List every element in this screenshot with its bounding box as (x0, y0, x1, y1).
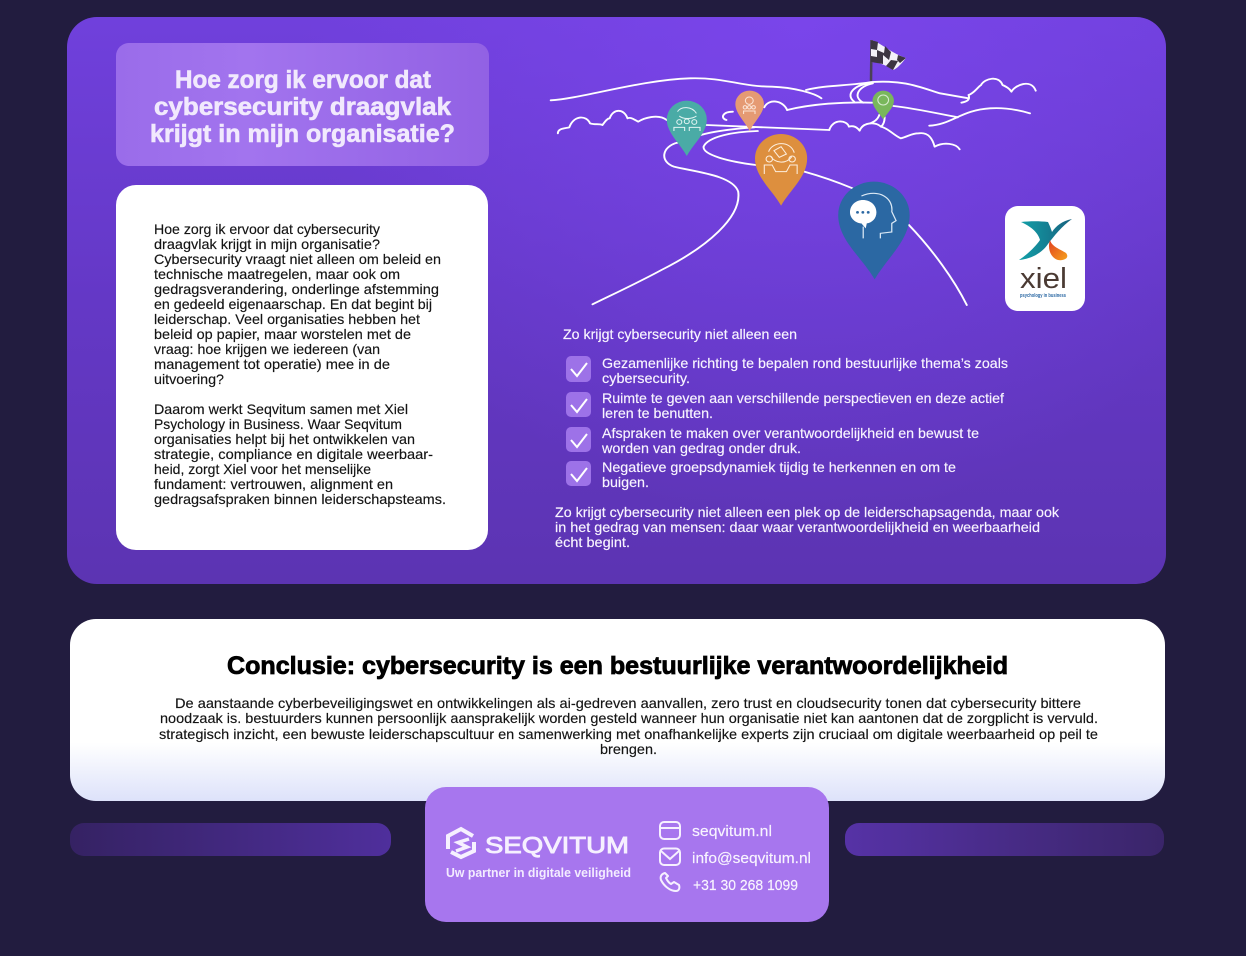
bar: left decorative (70, 823, 391, 856)
landscape lines (551, 78, 1036, 305)
logo: Seqvitum (448, 829, 629, 858)
logo: Xiel: psychology in business (1020, 293, 1066, 299)
pin: orange (755, 134, 807, 206)
check item 3 (566, 425, 979, 456)
check item 1: Gezamenlijke richting te bepalen rond bestuurlijke thema’s zoals (602, 355, 1008, 371)
paragraph: introduction: management tot operatie) mee in de (154, 356, 390, 372)
icon: browser (660, 822, 680, 839)
pin: blue (838, 182, 910, 279)
pin: teal (667, 101, 707, 156)
panel: main purple (67, 17, 1166, 584)
intro line: right column: Zo krijgt cybersecurity niet alleen een (563, 326, 797, 342)
title box: krijgt in mijn organisatie? (150, 120, 455, 148)
check item 2: Ruimte te geven aan verschillende perspectieven en deze actief (602, 390, 1004, 406)
conclusion text: noodzaak is. bestuurders kunnen persoonlijk aansprakelijk worden gesteld wanneer hun organisatie niet kan aantonen dat de zorgplicht is vervuld. (160, 710, 1098, 726)
paragraph: introduction: beleid op papier, maar worstelen met de (154, 326, 411, 342)
pin: light orange (735, 91, 764, 131)
conclusion text: brengen. (600, 741, 657, 757)
paragraph: Seqvitum and Xiel: fundament: vertrouwen, alignment en (154, 476, 393, 492)
paragraph: introduction: draagvlak krijgt in mijn organisatie? (154, 236, 380, 252)
paragraph: Seqvitum and Xiel: strategie, compliance en digitale weerbaar- (154, 446, 433, 462)
conclusion text (159, 695, 1098, 757)
check item 4: Negatieve groepsdynamiek tijdig te herkennen en om te (602, 459, 956, 475)
illustration: winding road with pins (551, 78, 1036, 305)
paragraph: Seqvitum and Xiel: gedragsafspraken binnen leiderschapsteams. (154, 491, 446, 507)
conclusion text: strategisch inzicht, een bewuste leiderschapscultuur en samenwerking met onafhankelijke experts zijn cruciaal om digitale weerbaarheid op peil te (159, 726, 1098, 742)
paragraph: introduction: Cybersecurity vraagt niet alleen om beleid en (154, 251, 441, 267)
tagline: Uw partner in digitale veiligheid (446, 865, 631, 880)
logo: Seqvitum: SEQVITUM (485, 832, 629, 858)
check item 1 (566, 355, 1008, 386)
closing text: right column (555, 504, 1060, 550)
check item 3: worden van gedrag onder druk. (601, 440, 801, 456)
check item 4: buigen. (602, 474, 649, 490)
paragraph: Seqvitum and Xiel: organisaties helpt bij het ontwikkelen van (154, 431, 415, 447)
icon: checkered flag (871, 40, 906, 81)
check item 1: cybersecurity. (602, 370, 690, 386)
icon: phone (661, 873, 679, 891)
paragraph: introduction: uitvoering? (154, 371, 224, 387)
check item 3: Afspraken te maken over verantwoordelijkheid en bewust te (602, 425, 979, 441)
conclusion heading: Conclusie: cybersecurity is een bestuurlijke verantwoordelijkheid (227, 652, 1008, 680)
closing text: right column: Zo krijgt cybersecurity niet alleen een plek op de leiderschapsagenda, maar ook (555, 504, 1060, 520)
closing text: right column: écht begint. (555, 534, 630, 550)
panel: conclusion (70, 619, 1165, 801)
closing text: right column: in het gedrag van mensen: daar waar verantwoordelijkheid en weerbaarheid (555, 519, 1040, 535)
title box: Hoe zorg ik ervoor dat (175, 66, 432, 94)
paragraph: introduction: vraag: hoe krijgen we iedereen (van (154, 341, 380, 357)
panel: footer contact card (425, 787, 829, 922)
email: info@seqvitum.nl (692, 850, 811, 867)
paragraph: introduction: gedragsverandering, onderlinge afstemming (154, 281, 439, 297)
paragraph: introduction: technische maatregelen, maar ook om (154, 266, 400, 282)
panel: intro text card (116, 185, 488, 550)
paragraph: introduction (154, 221, 441, 387)
phone number: +31 30 268 1099 (693, 877, 798, 894)
icon: mail (660, 848, 680, 865)
paragraph: Seqvitum and Xiel: heid, zorgt Xiel voor het menselijke (154, 461, 371, 477)
website: seqvitum.nl (692, 823, 772, 840)
pin: green (872, 91, 894, 119)
conclusion text: De aanstaande cyberbeveiligingswet en ontwikkelingen als ai-gedreven aanvallen, zero trust en cloudsecurity tonen dat cybersecurity bittere (175, 695, 1081, 711)
check item 2: leren te benutten. (602, 405, 713, 421)
title box: cybersecurity draagvlak (154, 93, 451, 121)
bar: right decorative (845, 823, 1164, 856)
paragraph: Seqvitum and Xiel (154, 401, 446, 507)
paragraph: Seqvitum and Xiel: Psychology in Business. Waar Seqvitum (154, 416, 402, 432)
checklist (566, 355, 1008, 490)
check item 2 (566, 390, 1004, 421)
title box (116, 43, 489, 166)
paragraph: introduction: leiderschap. Veel organisaties hebben het (154, 311, 420, 327)
paragraph: introduction: Hoe zorg ik ervoor dat cybersecurity (154, 221, 380, 237)
paragraph: introduction: en gedeeld eigenaarschap. En dat begint bij (154, 296, 432, 312)
paragraph: Seqvitum and Xiel: Daarom werkt Seqvitum samen met Xiel (154, 401, 408, 417)
logo: Xiel (1005, 206, 1085, 311)
check item 4 (566, 459, 956, 490)
logo: Xiel: xiel (1020, 263, 1067, 295)
